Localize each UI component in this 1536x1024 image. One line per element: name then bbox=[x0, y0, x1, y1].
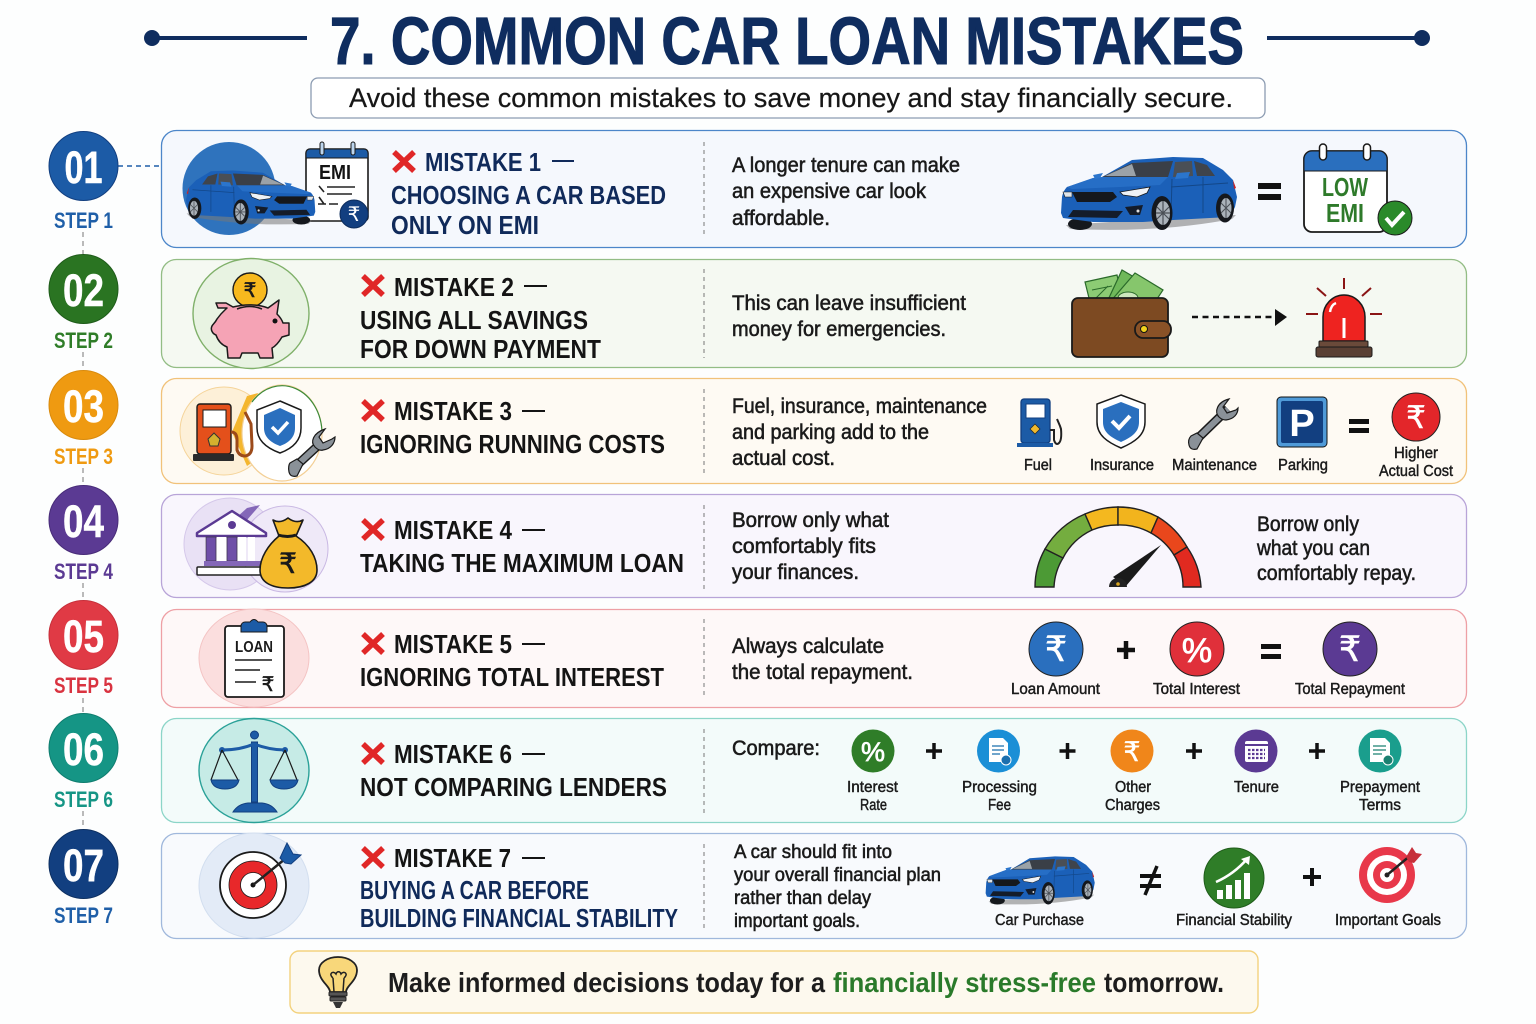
mistake 7 heading bbox=[360, 843, 678, 933]
item: interest rate bbox=[847, 730, 899, 814]
item: interest rate: Interest bbox=[847, 779, 899, 796]
step 6 badge: 06 bbox=[63, 724, 104, 775]
item: processing fee: Processing bbox=[962, 779, 1037, 796]
step 4 badge bbox=[49, 486, 118, 584]
icon: low EMI calendar: LOW bbox=[1322, 172, 1368, 202]
icon: loan clipboard bbox=[199, 609, 309, 707]
footer message bbox=[388, 967, 1224, 998]
step 2 badge: 02 bbox=[63, 265, 104, 316]
mistake 7 explanation: rather than delay bbox=[734, 888, 871, 909]
icon: red cross bbox=[363, 848, 383, 867]
icon: dart target bbox=[199, 833, 309, 938]
step 2 badge bbox=[49, 254, 118, 353]
plus bbox=[1060, 743, 1076, 759]
title bbox=[144, 4, 1430, 79]
mistake 5 heading bbox=[360, 629, 664, 692]
term: total repayment: Total Repayment bbox=[1295, 681, 1406, 698]
item: tenure: Tenure bbox=[1234, 779, 1279, 796]
step 3 badge: STEP 3 bbox=[54, 444, 113, 469]
step 3 badge: 03 bbox=[63, 381, 104, 432]
item: other charges: ₹ bbox=[1123, 737, 1141, 768]
mistake 4 heading: MISTAKE 4 bbox=[394, 515, 512, 545]
term: loan amount: ₹ bbox=[1045, 630, 1067, 670]
footer message: financially stress-free bbox=[833, 967, 1096, 998]
icon: blue car bbox=[1061, 157, 1237, 230]
compare label: Compare: bbox=[732, 737, 820, 760]
mistake 5 heading: IGNORING TOTAL INTEREST bbox=[360, 662, 664, 692]
gauge note bbox=[1256, 513, 1416, 585]
mistake 7 heading: MISTAKE 7 bbox=[394, 843, 511, 873]
mistake 2 explanation: money for emergencies. bbox=[732, 318, 946, 341]
needle bbox=[1109, 545, 1161, 587]
step 7 badge: 07 bbox=[63, 840, 104, 891]
cost result: higher actual cost bbox=[1379, 393, 1454, 480]
step 7 badge bbox=[49, 830, 118, 928]
term: loan amount: Loan Amount bbox=[1011, 681, 1101, 698]
panel: mistake 3 bbox=[162, 378, 1466, 484]
item: processing fee bbox=[962, 730, 1037, 814]
mistake 7 heading: BUILDING FINANCIAL STABILITY bbox=[360, 903, 678, 933]
item: other charges: Charges bbox=[1105, 797, 1160, 814]
icon: red cross bbox=[363, 276, 383, 295]
mistake 3 heading bbox=[360, 396, 665, 459]
mistake 7 heading: BUYING A CAR BEFORE bbox=[360, 875, 589, 905]
subtitle: Avoid these common mistakes to save money and stay financially secure. bbox=[349, 83, 1233, 113]
cost item: maintenance bbox=[1172, 399, 1257, 474]
icon: piggy bank: ₹ bbox=[244, 278, 256, 302]
mistake 1 heading: CHOOSING A CAR BASED bbox=[391, 180, 666, 210]
title right rule bbox=[1267, 30, 1430, 46]
step 7 badge: STEP 7 bbox=[54, 903, 113, 928]
panel: mistake 7 bbox=[162, 833, 1466, 938]
footer callout bbox=[290, 951, 1258, 1013]
icon: red cross bbox=[363, 520, 383, 539]
mistake 1 explanation: affordable. bbox=[732, 207, 830, 230]
gauge chart bbox=[1035, 507, 1201, 587]
mistake 7 explanation: important goals. bbox=[734, 911, 860, 932]
mistake 5 explanation: Always calculate bbox=[732, 635, 884, 658]
item: interest rate: Rate bbox=[860, 797, 887, 814]
mistake 3 explanation: Fuel, insurance, maintenance bbox=[732, 395, 987, 418]
mistake 2 heading: FOR DOWN PAYMENT bbox=[360, 334, 601, 364]
mistake 1 heading: ONLY ON EMI bbox=[391, 210, 539, 240]
icon: fuel pump, shield and wrench bbox=[180, 385, 335, 481]
mistake 3 explanation: actual cost. bbox=[732, 447, 835, 470]
mistake 7 explanation: your overall financial plan bbox=[734, 865, 941, 886]
cost item: maintenance: Maintenance bbox=[1172, 457, 1257, 474]
icon: balance scale bbox=[199, 718, 309, 822]
step 6 badge bbox=[49, 714, 118, 812]
equals bbox=[1349, 419, 1369, 433]
cost result: higher actual cost: ₹ bbox=[1406, 400, 1426, 436]
term: loan amount bbox=[1011, 622, 1101, 698]
footer message: tomorrow. bbox=[1104, 967, 1224, 998]
mistake 2 heading: USING ALL SAVINGS bbox=[360, 305, 588, 335]
mistake 4 explanation bbox=[732, 509, 889, 584]
cost item: insurance: Insurance bbox=[1090, 457, 1154, 474]
mistake 1 heading: MISTAKE 1 bbox=[425, 147, 541, 177]
mistake 6 heading: MISTAKE 6 bbox=[394, 739, 512, 769]
icon: bank and money bag bbox=[184, 498, 328, 592]
mistake 7 explanation: A car should fit into bbox=[734, 842, 892, 863]
item: prepayment terms: Prepayment bbox=[1340, 779, 1421, 796]
item: financial stability: Financial Stability bbox=[1176, 912, 1292, 929]
step 1 badge: STEP 1 bbox=[54, 208, 113, 233]
mistake 5 explanation: the total repayment. bbox=[732, 661, 913, 684]
plus bbox=[1186, 743, 1202, 759]
term: total interest bbox=[1153, 622, 1241, 698]
cost item: fuel: Fuel bbox=[1024, 457, 1052, 474]
mistake 3 heading: IGNORING RUNNING COSTS bbox=[360, 429, 665, 459]
icon: red cross bbox=[394, 152, 414, 171]
mistake 4 heading bbox=[360, 515, 684, 578]
icon: red alarm siren bbox=[1306, 278, 1382, 357]
not equal bbox=[1140, 866, 1161, 895]
icon: red cross bbox=[363, 634, 383, 653]
term: total repayment: ₹ bbox=[1339, 630, 1361, 670]
step 4 badge: STEP 4 bbox=[54, 559, 114, 584]
icon: low EMI calendar: EMI bbox=[1326, 198, 1364, 228]
plus bbox=[1117, 641, 1135, 659]
mistake 6 heading bbox=[360, 739, 667, 802]
cost result: higher actual cost: Actual Cost bbox=[1379, 463, 1454, 480]
icon: light bulb bbox=[319, 957, 357, 1008]
gauge note: what you can bbox=[1256, 537, 1370, 560]
step 5 badge: STEP 5 bbox=[54, 673, 113, 698]
panel: mistake 4 bbox=[162, 494, 1466, 598]
icon: loan clipboard: LOAN bbox=[235, 639, 273, 656]
cost item: parking: Parking bbox=[1278, 457, 1328, 474]
mistake 3 heading: MISTAKE 3 bbox=[394, 396, 512, 426]
gauge note: comfortably repay. bbox=[1257, 562, 1416, 585]
item: financial stability bbox=[1176, 848, 1292, 929]
item: processing fee: Fee bbox=[988, 797, 1011, 814]
icon: bank and money bag: ₹ bbox=[279, 547, 297, 580]
step connectors bbox=[83, 166, 161, 829]
icon: car and EMI sheet: ₹ bbox=[348, 202, 360, 226]
step 6 badge: STEP 6 bbox=[54, 787, 113, 812]
mistake 4 explanation: Borrow only what bbox=[732, 509, 889, 532]
item: other charges bbox=[1105, 730, 1160, 814]
title left rule bbox=[144, 30, 307, 46]
equals bbox=[1261, 644, 1281, 659]
item: prepayment terms bbox=[1340, 730, 1421, 814]
item: other charges: Other bbox=[1115, 779, 1151, 796]
footer message: Make informed decisions today for a bbox=[388, 967, 825, 998]
step 5 badge: 05 bbox=[63, 611, 104, 662]
mistake 4 heading: TAKING THE MAXIMUM LOAN bbox=[360, 548, 684, 578]
term: total repayment bbox=[1295, 622, 1406, 698]
mistake 2 explanation bbox=[732, 292, 966, 341]
mistake 4 explanation: comfortably fits bbox=[732, 535, 876, 558]
step 5 badge bbox=[49, 600, 118, 698]
step 1 badge bbox=[49, 132, 118, 233]
step 1 badge: 01 bbox=[64, 142, 102, 193]
mistake 5 explanation bbox=[732, 635, 913, 684]
mistake 1 heading bbox=[391, 147, 666, 240]
icon: low EMI calendar bbox=[1304, 144, 1412, 235]
term: total interest: Total Interest bbox=[1153, 681, 1241, 698]
cost item: parking: P bbox=[1289, 403, 1315, 445]
panel: mistake 5 bbox=[162, 609, 1466, 708]
icon: red cross bbox=[363, 744, 383, 763]
mistake 1 explanation: an expensive car look bbox=[732, 180, 926, 203]
subtitle bbox=[311, 78, 1265, 118]
gauge note: Borrow only bbox=[1257, 513, 1359, 536]
mistake 1 explanation: A longer tenure can make bbox=[732, 154, 960, 177]
icon: piggy bank bbox=[193, 258, 309, 368]
icon: car and EMI sheet bbox=[182, 142, 368, 235]
mistake 1 explanation bbox=[732, 154, 960, 230]
icon: car and EMI sheet: EMI bbox=[319, 162, 351, 184]
icon: wallet with cash bbox=[1072, 270, 1171, 357]
mistake 3 explanation: and parking add to the bbox=[732, 421, 929, 444]
mistake 4 explanation: your finances. bbox=[732, 561, 859, 584]
item: important goals: Important Goals bbox=[1335, 912, 1441, 929]
title text: 7. COMMON CAR LOAN MISTAKES bbox=[330, 4, 1244, 79]
mistake 6 heading: NOT COMPARING LENDERS bbox=[360, 772, 667, 802]
cost item: parking bbox=[1277, 397, 1328, 474]
step 4 badge: 04 bbox=[63, 496, 104, 547]
panel: mistake 2 bbox=[162, 258, 1466, 368]
step 3 badge bbox=[49, 370, 118, 469]
mistake 2 explanation: This can leave insufficient bbox=[732, 292, 966, 315]
panel: mistake 1 bbox=[162, 130, 1466, 248]
term: total interest: % bbox=[1182, 632, 1212, 670]
panel: mistake 6 bbox=[162, 718, 1466, 822]
item: car purchase bbox=[986, 856, 1095, 929]
cost result: higher actual cost: Higher bbox=[1394, 445, 1438, 462]
item: prepayment terms: Terms bbox=[1359, 797, 1401, 814]
mistake 5 heading: MISTAKE 5 bbox=[394, 629, 512, 659]
mistake 2 heading bbox=[360, 272, 601, 364]
icon: red cross bbox=[363, 401, 383, 420]
arrow: wallet to alarm bbox=[1192, 309, 1287, 326]
mistake 2 heading: MISTAKE 2 bbox=[394, 272, 514, 302]
item: car purchase: Car Purchase bbox=[995, 912, 1084, 929]
mistake 7 explanation bbox=[734, 842, 941, 932]
cost item: insurance bbox=[1090, 395, 1154, 474]
equals bbox=[1258, 183, 1281, 200]
step 2 badge: STEP 2 bbox=[54, 328, 113, 353]
plus bbox=[1309, 743, 1325, 759]
plus bbox=[926, 743, 942, 759]
item: interest rate: % bbox=[861, 737, 885, 767]
icon: loan clipboard: ₹ bbox=[262, 672, 274, 696]
item: tenure bbox=[1234, 730, 1279, 796]
cost item: fuel bbox=[1017, 399, 1061, 474]
plus bbox=[1303, 868, 1321, 886]
item: important goals bbox=[1335, 847, 1441, 929]
mistake 3 explanation bbox=[732, 395, 987, 470]
